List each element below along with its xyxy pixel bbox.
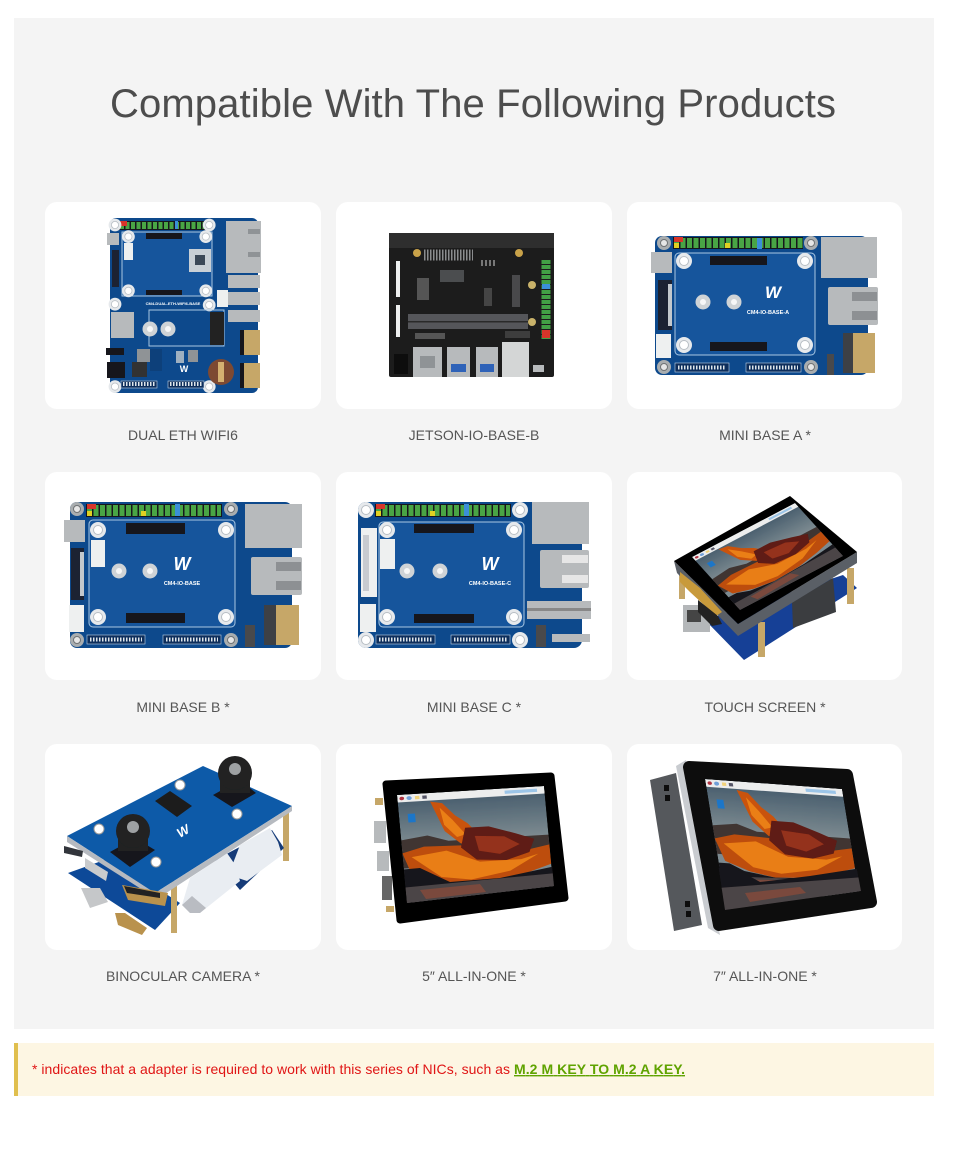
caption: BINOCULAR CAMERA *	[106, 968, 261, 984]
note accent border	[14, 1043, 18, 1096]
card: jetson-io-base-b	[336, 202, 612, 443]
card background	[45, 202, 321, 409]
product: cm4-io-base-c board	[358, 502, 591, 648]
card: dual eth wifi6	[45, 202, 321, 443]
product: cm4-io-base board	[64, 502, 302, 648]
product: jetson io base board	[389, 233, 554, 377]
note bar	[14, 1043, 934, 1096]
caption: DUAL ETH WIFI6	[128, 427, 238, 443]
product: cm4-io-base-a board	[651, 236, 878, 375]
card background	[336, 744, 612, 950]
note background	[14, 1043, 934, 1096]
card: 7 inch all-in-one	[627, 744, 902, 984]
product: binocular camera board: W	[174, 821, 194, 841]
card background	[336, 472, 612, 680]
product: cm4-io-base board: W	[174, 554, 192, 574]
caption: 5″ ALL-IN-ONE *	[422, 968, 526, 984]
product: 5 inch all-in-one display	[374, 776, 565, 920]
card background	[627, 744, 902, 950]
caption: 7″ ALL-IN-ONE *	[713, 968, 817, 984]
card: mini base b	[45, 472, 321, 715]
caption: MINI BASE A *	[719, 427, 811, 443]
card: touch screen	[627, 472, 902, 715]
card: binocular camera	[45, 744, 321, 984]
caption: MINI BASE B *	[136, 699, 230, 715]
product: touch screen on stacked boards	[674, 496, 857, 660]
caption: JETSON-IO-BASE-B	[409, 427, 539, 443]
product: 7 inch all-in-one display	[650, 760, 871, 935]
card background	[45, 472, 321, 680]
product: cm4-io-base-c board: W	[482, 554, 500, 574]
card background	[45, 744, 321, 950]
card: mini base a	[627, 202, 902, 443]
title: Compatible With The Following Products	[110, 82, 836, 126]
note text: * indicates that a adapter is required to work with this series of NICs, such as	[32, 1061, 510, 1077]
product: dual eth wifi6 board: CM4-DUAL-ETH-WIFI6-BASE	[146, 301, 201, 306]
card background	[627, 202, 902, 409]
product: dual eth wifi6 board	[106, 218, 261, 393]
note link: M.2 M KEY TO M.2 A KEY.	[514, 1061, 685, 1077]
card: 5 inch all-in-one	[336, 744, 612, 984]
card background	[336, 202, 612, 409]
product: cm4-io-base-c board: CM4-IO-BASE-C	[469, 581, 511, 587]
product: binocular camera board	[64, 756, 292, 935]
caption: TOUCH SCREEN *	[704, 699, 826, 715]
product: cm4-io-base-a board: W	[765, 283, 783, 302]
card: mini base c	[336, 472, 612, 715]
product: cm4-io-base board: CM4-IO-BASE	[164, 581, 201, 587]
product: dual eth wifi6 board: W	[180, 364, 189, 374]
product: cm4-io-base-a board: CM4-IO-BASE-A	[747, 310, 789, 316]
caption: MINI BASE C *	[427, 699, 522, 715]
card background	[627, 472, 902, 680]
